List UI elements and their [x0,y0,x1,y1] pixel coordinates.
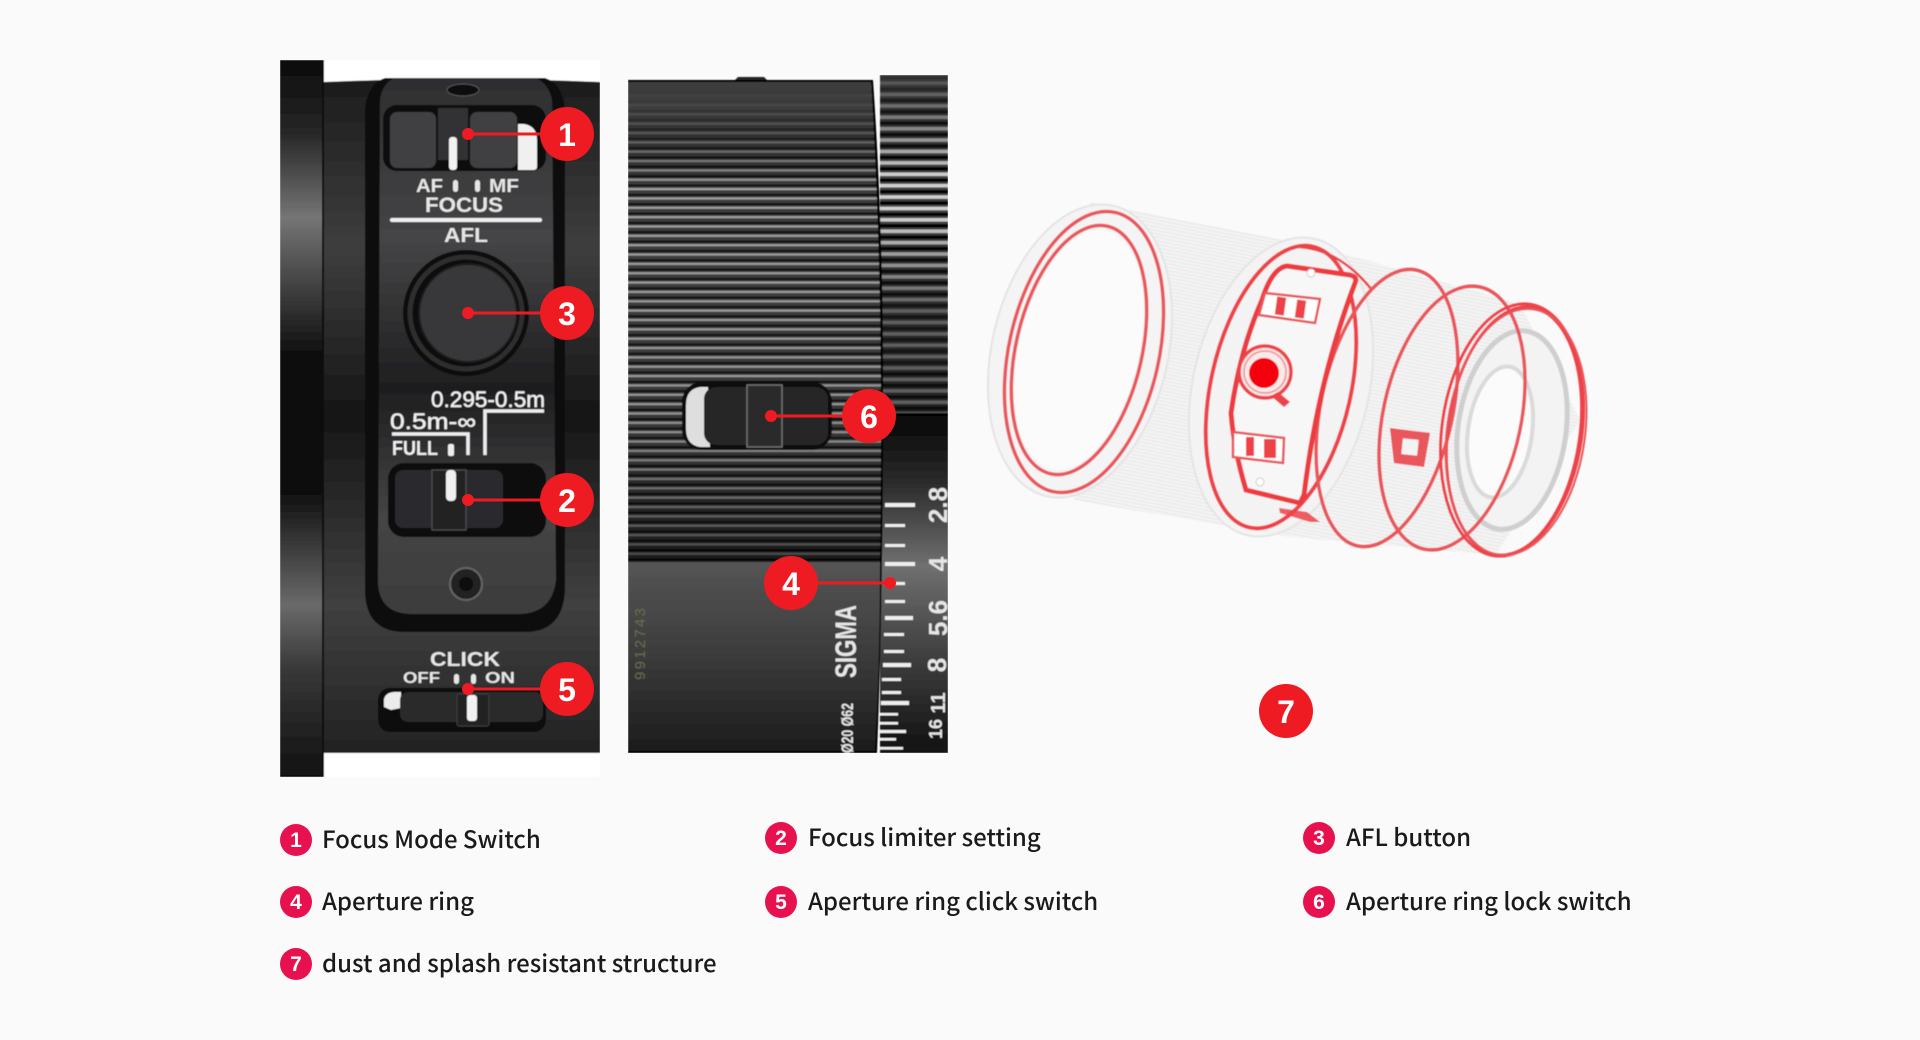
focus labels: MF [489,176,519,196]
legend item 2: 2 [775,827,787,850]
legend item 7: dust and splash resistant structure [322,944,717,979]
aperture numbers: 16 [926,719,946,739]
focus labels: FOCUS [425,194,503,217]
aperture click switch: OFF [403,670,440,687]
panel: lens side view with switches [280,60,600,777]
focus labels [390,176,542,247]
callout 6: 6 [860,399,878,435]
legend item 3: AFL button [1346,818,1471,853]
callout 7: 7 [1277,694,1295,730]
switch cover plate [365,78,565,632]
legend item 2: Focus limiter setting [808,818,1041,853]
seal around switch plate [1231,266,1356,522]
aperture numbers: 4 [923,556,953,571]
callout 7 [1259,684,1313,738]
callout 2: 2 [558,483,576,519]
focus limiter labels: 0.5m-∞ [390,409,476,434]
SIGMA logo and engraving: SIGMA [830,605,863,678]
callout 5 [462,662,594,716]
legend item 6: 6 [1313,891,1325,914]
callout 5: 5 [558,672,576,708]
aperture numbers: 11 [928,692,950,714]
callout 3 [462,286,594,340]
aperture numbers: 5.6 [923,600,953,636]
callout 4: 4 [782,566,800,602]
seal rings [980,196,1602,566]
focus labels: AF [416,176,443,196]
legend item 4: 4 [290,891,302,914]
panel: dust and splash resistant structure diagram [961,186,1602,566]
aperture numbers [926,486,948,739]
legend item 5: Aperture ring click switch [808,882,1098,917]
aperture scale ticks [879,503,915,750]
callout 4 [764,556,896,610]
focus limiter labels: FULL [392,438,438,460]
aperture click switch: ON [485,670,515,687]
callout 1 [462,107,594,161]
lens ghost body [961,186,1580,555]
legend item 1: Focus Mode Switch [322,820,541,855]
focus mode switch [383,105,546,171]
focus labels: AFL [444,225,488,247]
SIGMA logo and engraving: Ø20 Ø62 [838,703,857,753]
aperture click switch [378,649,546,732]
focus limiter labels: 0.295-0.5m [431,387,545,412]
legend item 4: Aperture ring [322,882,474,917]
aperture click switch: CLICK [430,649,501,671]
legend item 1: 1 [290,829,302,852]
callout 2 [462,473,594,527]
AFL button [403,250,529,376]
aperture ring lock switch [682,382,832,450]
callout 6 [765,389,896,443]
legend item 3: 3 [1313,827,1325,850]
aperture numbers: 2.8 [923,487,953,523]
legend item 6: Aperture ring lock switch [1346,882,1632,917]
callout 1: 1 [558,117,576,153]
preset tag [1390,428,1430,467]
legend item 7: 7 [290,953,302,976]
legend item 5: 5 [775,891,787,914]
aperture numbers: 8 [922,658,952,672]
focus limiter switch [388,463,546,537]
SIGMA logo and engraving: 9912743 [632,608,649,680]
panel: lens barrel view with aperture ring [628,75,953,753]
AFL seal [1239,346,1291,407]
focus limiter labels [390,387,545,460]
SIGMA logo and engraving [632,605,863,753]
callout 3: 3 [558,296,576,332]
